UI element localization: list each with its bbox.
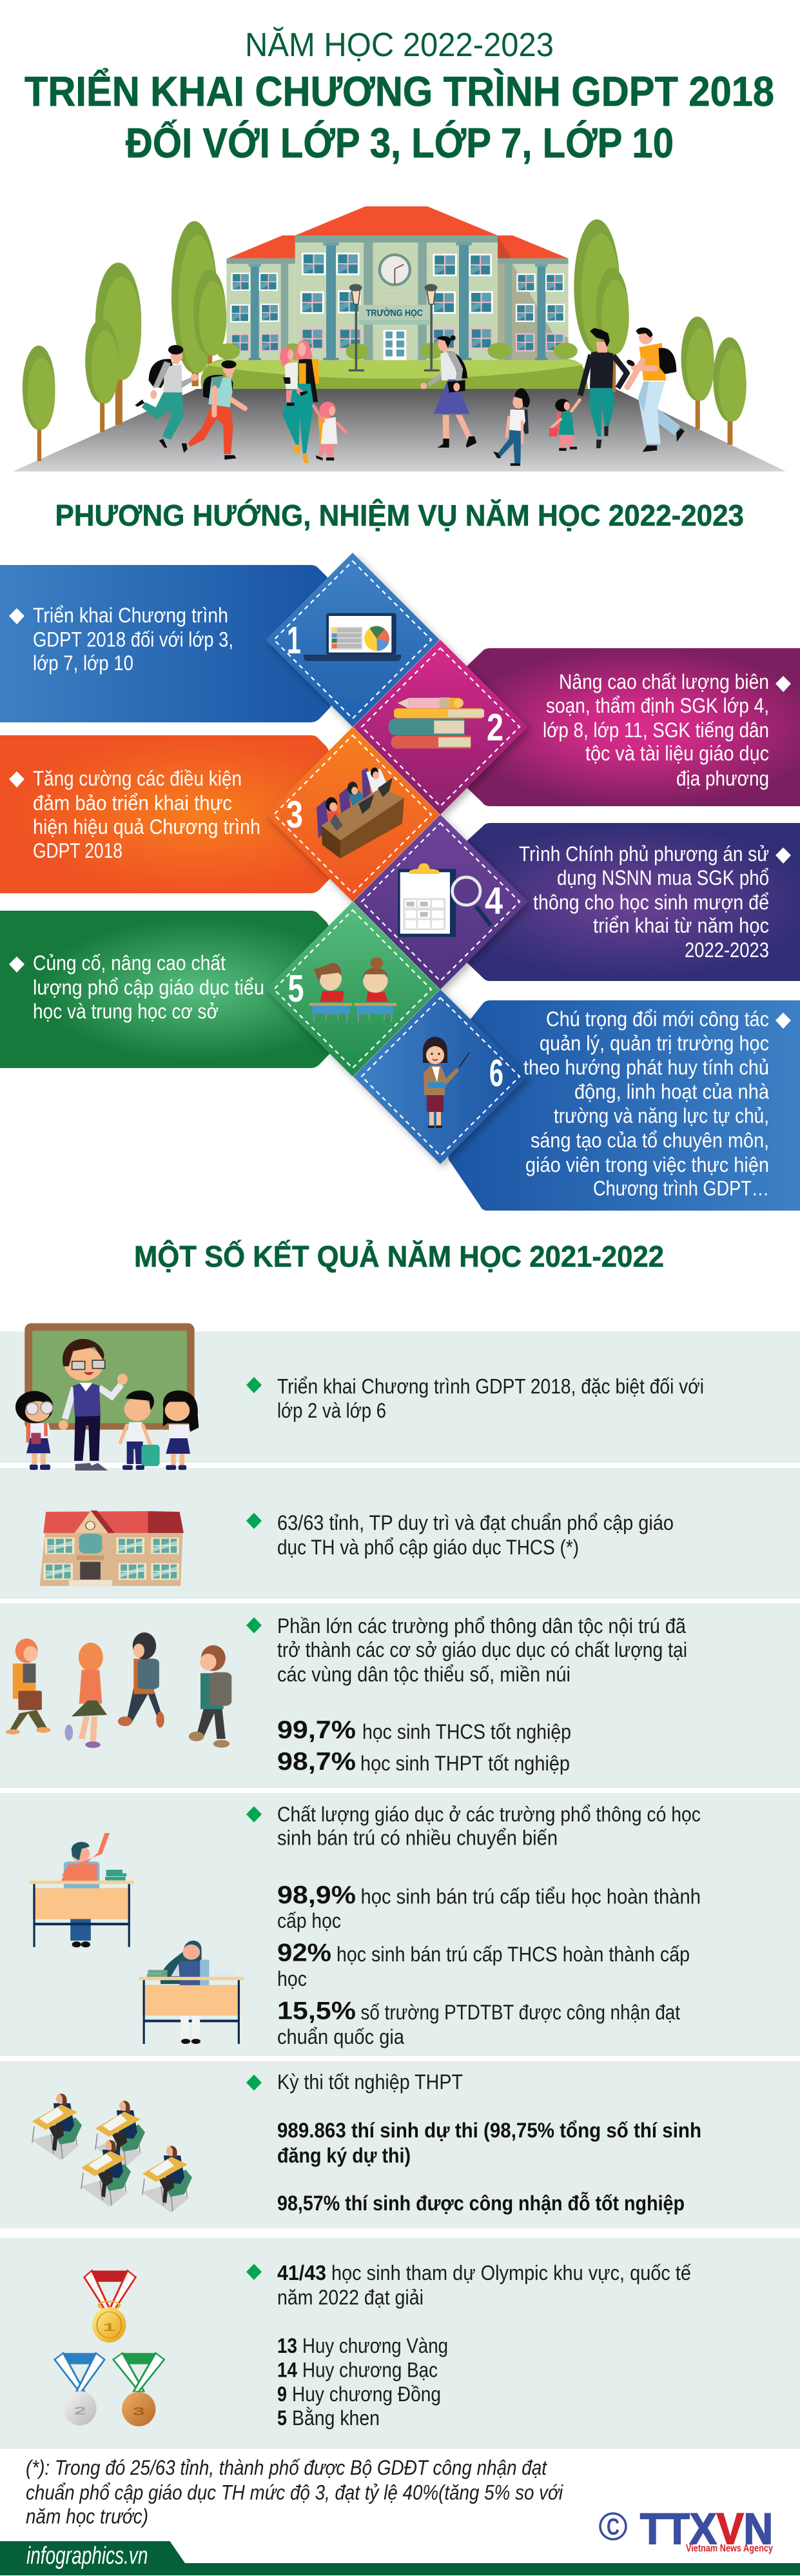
footnote: chuẩn phổ cập giáo dục TH mức độ 3, đạt tỷ lệ 40%(tăng 5% so với	[26, 2481, 563, 2504]
panel 4: 2022-2023	[685, 938, 769, 962]
pupil boy	[126, 1422, 146, 1442]
boy with backpack	[516, 408, 529, 434]
section heading: results: MỘT SỐ KẾT QUẢ NĂM HỌC 2021-2022	[134, 1240, 664, 1273]
row 3: học sinh THPT tốt nghiệp	[360, 1752, 570, 1775]
school building: TRƯỜNG HỌC	[366, 307, 423, 319]
student 2	[79, 1643, 103, 1672]
panel 5: lượng phổ cập giáo dục tiểu	[33, 976, 264, 999]
row 4: cấp học	[277, 1909, 341, 1932]
student 1	[10, 1710, 47, 1731]
panel 2: địa phương	[676, 767, 769, 790]
panel 3	[0, 735, 361, 893]
row 2: 63/63 tỉnh, TP duy trì và đạt chuẩn phổ cập giáo	[277, 1511, 674, 1534]
runner	[149, 359, 173, 388]
row 3: 99,7%	[277, 1716, 356, 1744]
row 4: 98,9%	[277, 1881, 356, 1909]
row 4: 92%	[277, 1939, 331, 1967]
diamond 6: teacher: 6	[489, 1052, 503, 1095]
small girl	[556, 411, 567, 434]
icon: books and pencil	[389, 697, 484, 749]
panel 1: lớp 7, lớp 10	[33, 651, 133, 675]
mother and children	[307, 359, 319, 384]
icon: medals: 3	[133, 2404, 145, 2417]
row 6: Huy chương Bạc	[302, 2358, 438, 2381]
diamond 5: pupils	[266, 902, 440, 1076]
people left group	[135, 340, 346, 463]
icon: school building	[40, 1511, 184, 1586]
icon: exam students	[32, 2094, 192, 2213]
row 6: học sinh tham dự Olympic khu vực, quốc tế	[331, 2261, 691, 2284]
icon: clipboard and magnifier	[398, 863, 491, 937]
row 3: trở thành các cơ sở giáo dục dục có chất lượng tại	[277, 1638, 687, 1661]
row 4: sinh bán trú có nhiều chuyển biến	[277, 1827, 558, 1850]
panel 6: sáng tạo của tổ chuyên môn,	[531, 1129, 769, 1152]
panel 6	[440, 1000, 800, 1211]
row 6: Bằng khen	[292, 2406, 380, 2430]
icon: medals	[55, 2271, 164, 2426]
row 1: Triển khai Chương trình GDPT 2018, đặc biệt đối với	[277, 1375, 704, 1398]
logo: TTXVN: C	[607, 2513, 620, 2540]
panel 6: giáo viên trong việc thực hiện	[525, 1153, 769, 1176]
desk 1	[64, 1861, 99, 1890]
walking boy	[203, 375, 224, 399]
silver medal	[55, 2353, 84, 2392]
panel 5: học và trung học cơ sở	[33, 1000, 219, 1023]
panel 4: triển khai từ năm học	[593, 914, 769, 937]
diamond 5: pupils: 5	[288, 967, 304, 1010]
row 6: năm 2022 đạt giải	[277, 2286, 424, 2309]
sign	[358, 305, 430, 320]
row 6: 13	[277, 2334, 297, 2357]
row 3: Phần lớn các trường phổ thông dân tộc nội trú đã	[277, 1614, 686, 1638]
row 5: đăng ký dự thi)	[277, 2144, 411, 2167]
icon: teacher and pupils at blackboard	[15, 1323, 199, 1471]
row 4: học sinh bán trú cấp tiểu học hoàn thành	[361, 1885, 701, 1908]
door	[384, 330, 406, 360]
panel 4	[425, 823, 800, 981]
trees	[23, 219, 746, 461]
pupil girl	[163, 1391, 199, 1432]
row 4	[0, 1793, 800, 2056]
panel 1: Triển khai Chương trình	[33, 604, 228, 627]
row 3: học sinh THCS tốt nghiệp	[362, 1720, 571, 1743]
title: school year: NĂM HỌC 2022-2023	[245, 26, 554, 64]
grass	[201, 359, 588, 389]
footnote	[26, 2456, 563, 2528]
diamond 1: laptop: 1	[287, 619, 301, 662]
panel 2: lớp 8, lớp 11, SGK tiếng dân	[543, 718, 769, 742]
man with phone	[638, 382, 680, 444]
row 4: học sinh bán trú cấp THCS hoàn thành cấp	[337, 1943, 690, 1966]
row 1	[0, 1331, 800, 1463]
section heading: directions and tasks: PHƯƠNG HƯỚNG, NHIỆM VỤ NĂM HỌC 2022-2023	[55, 499, 744, 532]
diamond 3: team at desk: 3	[286, 793, 303, 836]
row 4: học	[277, 1967, 307, 1990]
panel 1: GDPT 2018 đối với lớp 3,	[33, 628, 233, 651]
panel 3: hiện hiệu quả Chương trình	[33, 815, 260, 838]
row 5	[0, 2061, 800, 2228]
hero illustration: school and people	[13, 206, 786, 471]
footer bar: infographics.vn	[26, 2542, 148, 2570]
icon: laptop with charts	[304, 613, 401, 661]
panel 3: đảm bảo triển khai thực	[33, 791, 232, 815]
panel 3: GDPT 2018	[33, 839, 122, 862]
row 4: Chất lượng giáo dục ở các trường phổ thông có học	[277, 1803, 701, 1826]
icon: people at desk	[317, 768, 404, 858]
diamond 3: team at desk	[266, 727, 440, 902]
row 5: 98,57% thí sinh được công nhận đỗ tốt nghiệp	[277, 2192, 685, 2215]
lamps	[355, 303, 357, 370]
row 6: 14	[277, 2358, 297, 2381]
row 3: 98,7%	[277, 1748, 356, 1776]
diamond 2: books: 2	[487, 706, 503, 749]
panel 6: Chương trình GDPT…	[593, 1176, 769, 1200]
panel 2: tộc và tài liệu giáo dục	[585, 742, 769, 765]
road	[13, 389, 786, 471]
title: main heading: ĐỐI VỚI LỚP 3, LỚP 7, LỚP 10	[126, 119, 674, 166]
panel 4: Trình Chính phủ phương án sử	[519, 842, 769, 866]
title: main heading	[24, 68, 774, 166]
row 2: dục TH và phổ cập giáo dục THCS (*)	[277, 1536, 579, 1559]
panel 1	[0, 565, 361, 722]
diamond 2: books	[353, 640, 528, 815]
panel 2: Nâng cao chất lượng biên	[559, 670, 769, 693]
diamond 1: laptop	[266, 553, 440, 727]
panel 2: soạn, thẩm định SGK lớp 4,	[546, 694, 769, 717]
footer bar	[0, 2541, 800, 2575]
row 4: số trường PTDTBT được công nhận đạt	[361, 2001, 680, 2024]
row 6: Huy chương Vàng	[302, 2334, 448, 2357]
logo: TTXVN: Vietnam News Agency	[686, 2543, 773, 2554]
bronze medal	[113, 2353, 144, 2392]
bushes	[284, 343, 302, 360]
panel 6: Chú trọng đổi mới công tác	[546, 1007, 769, 1031]
row 5: 989.863 thí sinh dự thi (98,75% tổng số thí sinh	[277, 2119, 701, 2142]
logo: TTXVN: TTXVN	[640, 2504, 773, 2553]
icon: boy and girl at desks	[309, 957, 396, 1022]
row 4: chuẩn quốc gia	[277, 2025, 404, 2048]
gold medal	[84, 2271, 110, 2309]
panel 5	[0, 911, 361, 1068]
row 1: lớp 2 và lớp 6	[277, 1399, 386, 1422]
row 6: 9	[277, 2383, 287, 2406]
people right group	[420, 328, 685, 466]
clock	[378, 253, 411, 286]
footnote: (*): Trong đó 25/63 tỉnh, thành phố được Bộ GDĐT công nhận đạt	[26, 2456, 547, 2479]
panel 6: quản lý, quản trị trường học	[540, 1032, 769, 1055]
woman with skirt	[447, 352, 467, 379]
diamond 4: clipboard: 4	[485, 880, 503, 922]
panel 6: trường và năng lực tự chủ,	[554, 1104, 769, 1127]
row 4: 15,5%	[277, 1997, 356, 2025]
diamond 4: clipboard	[353, 815, 528, 989]
row 6: Huy chương Đồng	[292, 2383, 441, 2406]
school building	[217, 206, 578, 372]
icon: students at desks	[29, 1833, 244, 2044]
row 3	[0, 1603, 800, 1788]
panel 5: Củng cố, nâng cao chất	[33, 951, 226, 975]
student 3	[122, 1688, 162, 1723]
panel 3: Tăng cường các điều kiện	[33, 767, 242, 790]
student 4	[197, 1707, 226, 1739]
icon: medals: 1	[103, 2321, 115, 2333]
icon: teacher with pointer	[423, 1037, 469, 1128]
man in black jacket	[590, 387, 614, 437]
panel 4: thông cho học sinh mượn để	[533, 891, 769, 914]
icon: medals: 2	[74, 2404, 86, 2417]
panel 6: động, linh hoạt của nhà	[574, 1080, 769, 1103]
panel 4: dụng NSNN mua SGK phổ	[557, 866, 769, 889]
desk 2	[161, 1941, 202, 1984]
pupil left	[32, 1453, 37, 1464]
row 6: 41/43	[277, 2261, 326, 2284]
diamond 6: teacher	[353, 989, 528, 1164]
panel 2	[425, 648, 800, 806]
row 6	[0, 2238, 800, 2449]
panel 6: theo hướng phát huy tính chủ	[523, 1056, 769, 1079]
row 2	[0, 1468, 800, 1599]
icon: walking students	[6, 1632, 231, 1748]
footnote: năm học trước)	[26, 2505, 148, 2528]
row 6: 5	[277, 2406, 287, 2430]
row 5: Kỳ thi tốt nghiệp THPT	[277, 2070, 463, 2094]
row 3: các vùng dân tộc thiểu số, miền núi	[277, 1663, 571, 1686]
